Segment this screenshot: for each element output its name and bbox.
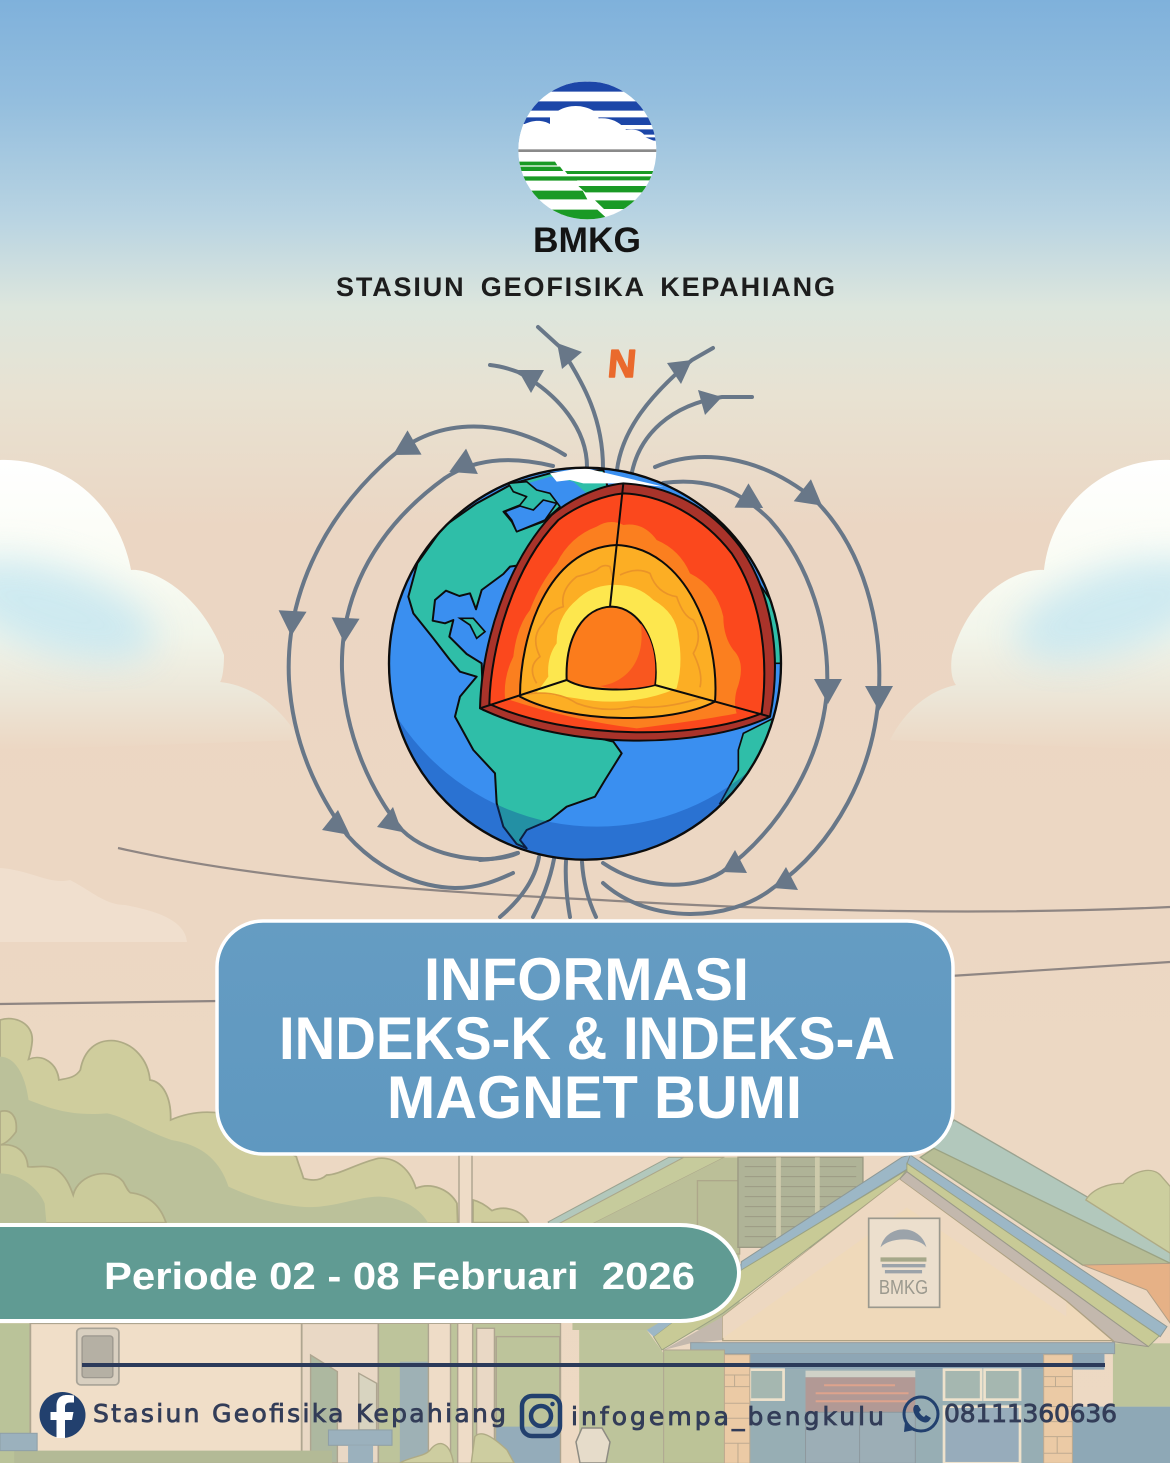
right side roof	[931, 1120, 1170, 1267]
gable bands	[741, 1155, 910, 1271]
cloud: right	[890, 460, 1170, 750]
louvre wall	[738, 1157, 863, 1247]
gable sign: BMKG	[879, 1277, 928, 1299]
label: north pole N: N	[606, 343, 638, 386]
porch beam	[691, 1343, 1115, 1354]
background scene: left building	[0, 1323, 560, 1463]
background scene: BMKG building	[548, 1120, 1170, 1463]
lantern	[576, 1428, 610, 1463]
gable sign	[869, 1218, 940, 1307]
title text: INDEKS-K & INDEKS-A	[279, 1005, 895, 1072]
layer division lines	[480, 483, 770, 717]
logo: BMKG emblem	[513, 81, 660, 219]
icon: facebook	[40, 1392, 86, 1438]
footer: instagram: infogempa_bengkulu	[571, 1402, 884, 1431]
window unit on wall	[77, 1328, 119, 1385]
panel: period pill	[0, 1225, 739, 1321]
background scene: bushes on the left	[0, 1019, 528, 1223]
footer: facebook: Stasiun Geofisika Kepahiang	[93, 1399, 506, 1428]
outer core yellow zone	[537, 585, 680, 702]
magnetic field lines with arrows	[277, 327, 893, 917]
outer core	[520, 545, 715, 718]
outer core convection lines	[527, 566, 703, 709]
footer: whatsapp	[904, 1397, 1117, 1432]
background scene: flagpole	[459, 1155, 472, 1225]
globe shadow crescent	[398, 719, 746, 858]
icon: instagram	[522, 1396, 560, 1436]
heading: station name: STASIUN GEOFISIKA KEPAHIANG	[336, 272, 835, 302]
crust	[480, 483, 775, 741]
porch interior	[750, 1370, 1044, 1463]
footer: whatsapp: 08111360636	[944, 1399, 1117, 1428]
door sign	[806, 1371, 915, 1463]
globe ocean	[389, 468, 781, 860]
power lines	[0, 848, 1170, 1004]
mantle warm band	[505, 522, 741, 728]
globe land	[398, 468, 780, 858]
inner core	[567, 607, 656, 690]
cloud: lower left faint	[0, 868, 187, 942]
footer: instagram	[522, 1396, 884, 1436]
gable wall	[723, 1179, 1113, 1341]
inner core shade	[600, 623, 655, 689]
rear left roof	[548, 1157, 740, 1330]
background scene: faded wash	[0, 1010, 1170, 1463]
earth interior wedge	[480, 483, 775, 741]
footer divider	[82, 1363, 1105, 1367]
cloud: left	[0, 460, 300, 750]
period text: Periode 02 - 08 Februari 2026	[104, 1256, 695, 1298]
panel: main title box	[217, 921, 953, 1154]
illustration: earth with cut-away interior	[388, 466, 782, 861]
globe outline	[389, 468, 781, 860]
title text: MAGNET BUMI	[387, 1064, 802, 1131]
title text: INFORMASI	[424, 946, 749, 1013]
icon: whatsapp	[904, 1397, 938, 1432]
logo wordmark: BMKG	[533, 221, 641, 260]
mantle	[489, 493, 764, 732]
footer: facebook	[40, 1392, 506, 1438]
brick columns	[724, 1355, 1072, 1463]
title text	[279, 946, 895, 1131]
